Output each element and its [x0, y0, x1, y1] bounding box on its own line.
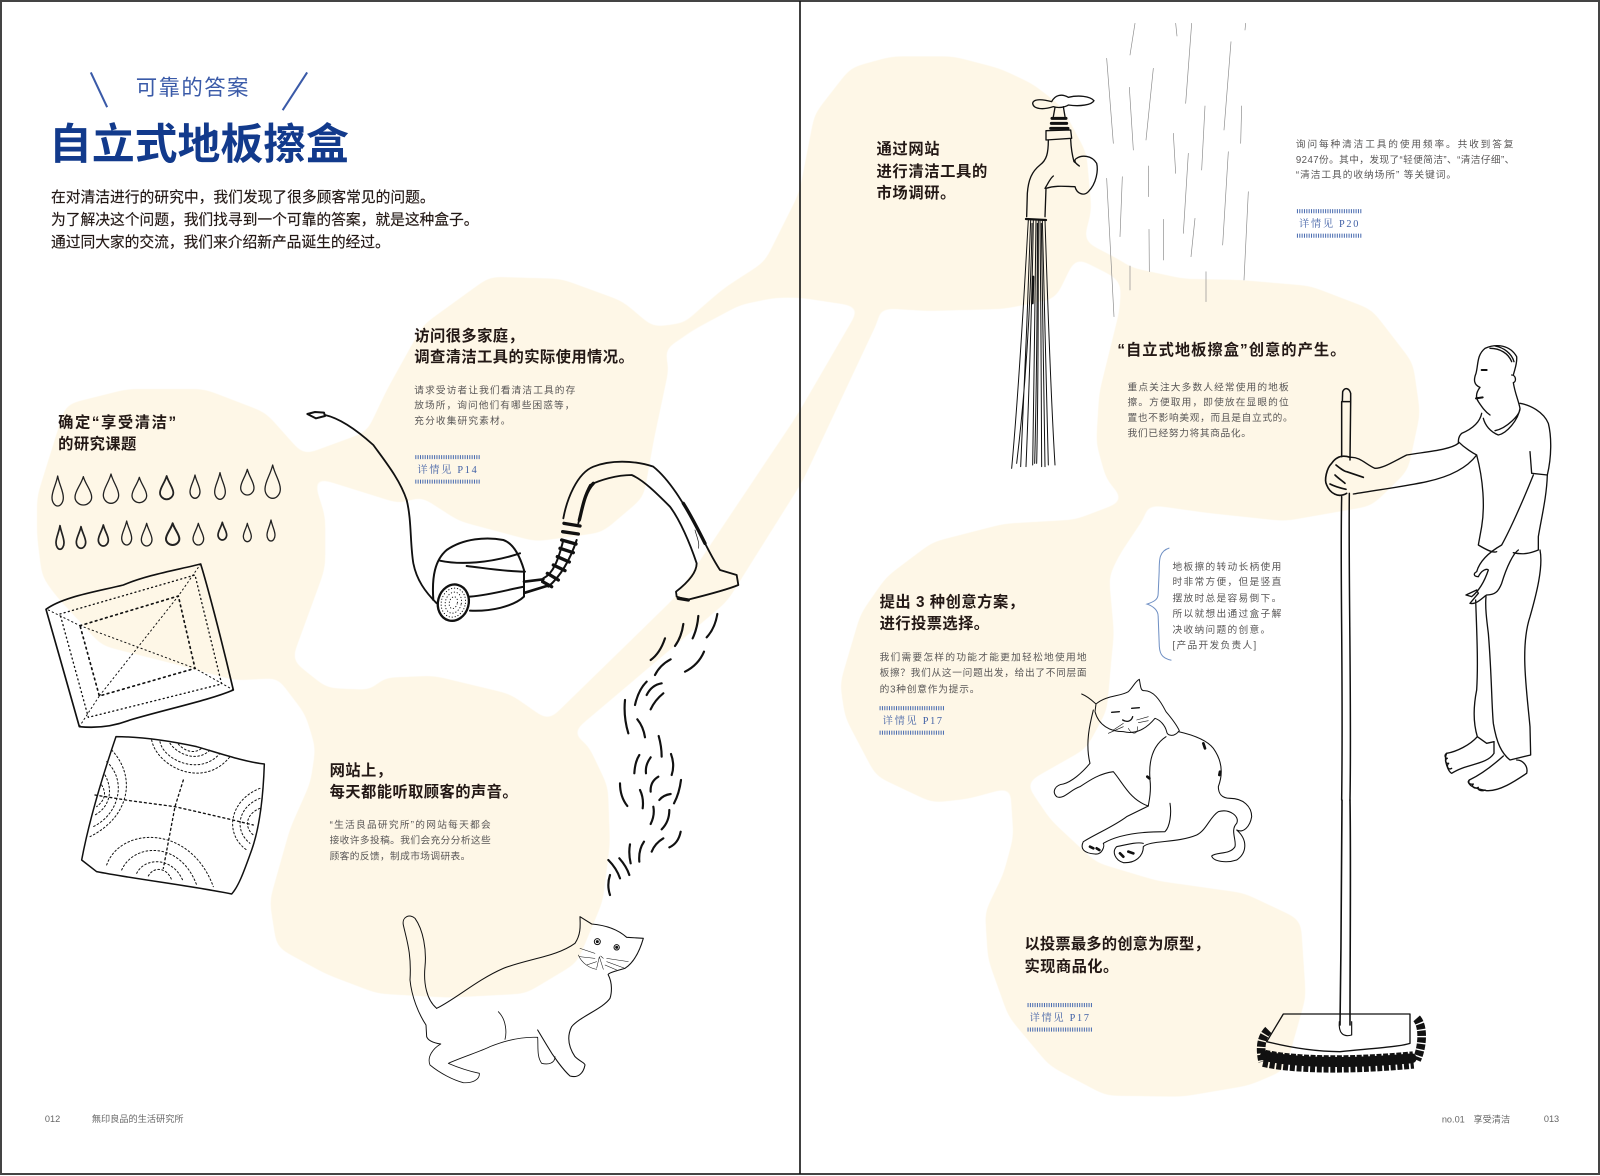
- step: home visits: 放场所，询问他们有哪些困惑等，: [414, 399, 576, 412]
- step: three proposals: [880, 593, 1088, 733]
- step: productize: [1024, 935, 1210, 1030]
- intro text: 在对清洁进行的研究中，我们发现了很多顾客常见的问题。: [51, 189, 435, 206]
- step: web survey: 进行清洁工具的: [877, 163, 988, 181]
- step: home visits: 请求受访者让我们看清洁工具的存: [414, 383, 576, 396]
- step: three proposals: 的3种创意作为提示。: [880, 682, 981, 695]
- step: web survey: 市场调研。: [877, 184, 956, 202]
- intro text: 为了解决这个问题，我们找寻到一个可靠的答案，就是这种盒子。: [51, 210, 479, 228]
- tag: see P17: 详情见 P17: [883, 714, 944, 727]
- mop pole lower: [1340, 800, 1350, 1025]
- step: three proposals: 提出 3 种创意方案，: [880, 593, 1024, 611]
- brace: [1147, 548, 1171, 660]
- mop pole upper: [1341, 389, 1351, 800]
- legs and feet: [1474, 550, 1541, 760]
- step: home visits: [414, 327, 634, 482]
- footer left: 012: [45, 1114, 60, 1124]
- napkin 1: [46, 564, 233, 727]
- step: web survey: [877, 141, 988, 202]
- title: 自立式地板擦盒: [49, 121, 349, 169]
- step: three proposals: 进行投票选择。: [880, 615, 990, 633]
- step: customer voice: “生活良品研究所”的网站每天都会: [330, 818, 492, 831]
- developer note with brace: 时非常方便，但是竖直: [1172, 575, 1283, 588]
- step: idea born: 置也不影响美观，而且是自立式的。: [1128, 411, 1294, 424]
- step: productize: 实现商品化。: [1024, 957, 1119, 975]
- footer right: [1442, 1113, 1559, 1124]
- step: customer voice: 顾客的反馈，制成市场调研表。: [330, 850, 471, 863]
- step: idea born: 我们已经努力将其商品化。: [1128, 427, 1252, 440]
- heading decoration: right slash: [283, 72, 307, 110]
- developer note with brace: 摆放时总是容易倒下。: [1172, 592, 1283, 605]
- subtitle: 可靠的答案: [136, 76, 250, 100]
- cat face: [578, 948, 628, 970]
- tag: see P17: [880, 708, 945, 733]
- step: home visits: 访问很多家庭，: [414, 327, 524, 345]
- step: three proposals: 板擦？我们从这一问题出发，给出了不同层面: [880, 666, 1088, 679]
- developer note with brace: [1147, 548, 1283, 660]
- step: research topic: 确定“享受清洁”: [58, 414, 177, 432]
- step: customer voice: 每天都能听取顾客的声音。: [330, 783, 518, 801]
- step: idea born: 重点关注大多数人经常使用的地板: [1128, 380, 1290, 393]
- rain lines: [1107, 23, 1248, 317]
- step: three proposals: 我们需要怎样的功能才能更加轻松地使用地: [880, 651, 1088, 664]
- footer left: [45, 1113, 184, 1124]
- head: [1475, 346, 1520, 435]
- icon: licking cat: [1054, 679, 1252, 863]
- icon: napkins and water drops: [46, 465, 280, 894]
- step: idea born: 擦。方便取用，即使放在显眼的位: [1128, 396, 1290, 409]
- step: customer voice: 接收许多投稿。我们会充分分析这些: [330, 833, 492, 846]
- step: research topic: [58, 414, 177, 453]
- torso and arms: [1351, 403, 1551, 552]
- survey detail text: “清洁工具的收纳场所” 等关键词。: [1296, 168, 1457, 181]
- cat body: [403, 916, 441, 1044]
- tag: see P14: [415, 457, 481, 482]
- step: home visits: 调查清洁工具的实际使用情况。: [414, 348, 634, 366]
- step: research topic: 的研究课题: [58, 435, 137, 453]
- heading decoration: left slash: [91, 72, 107, 107]
- intro text: 通过同大家的交流，我们来介绍新产品诞生的经过。: [51, 233, 390, 251]
- icon: vacuum cleaner: [307, 412, 738, 624]
- survey detail text: 9247份。其中，发现了“轻便简洁”、“清洁仔细”、: [1296, 153, 1515, 166]
- drops row 2: [56, 520, 275, 549]
- icon: man holding mop: [1326, 346, 1551, 800]
- tag: see P20: 详情见 P20: [1299, 217, 1360, 230]
- background: cream blobs and connectors: [38, 57, 1419, 1096]
- faucet body: [1033, 95, 1094, 109]
- developer note with brace: [产品开发负责人]: [1172, 638, 1258, 651]
- step: idea born: “自立式地板擦盒”创意的产生。: [1117, 341, 1346, 359]
- tag: see P20: [1297, 211, 1362, 236]
- water jet: [1026, 219, 1046, 220]
- scattered dust dashes: [608, 614, 717, 895]
- intro text: [51, 189, 479, 251]
- drops row 1: [52, 465, 280, 506]
- footer right: 013: [1544, 1114, 1559, 1124]
- footer right: no.01: [1442, 1114, 1465, 1124]
- developer note with brace: 地板擦的转动长柄使用: [1172, 560, 1283, 573]
- tag: see P17: 详情见 P17: [1030, 1011, 1091, 1024]
- survey detail text: [1296, 137, 1515, 236]
- tag: see P17: [1028, 1005, 1093, 1030]
- step: web survey: 通过网站: [877, 141, 940, 158]
- step: customer voice: 网站上，: [330, 763, 392, 780]
- survey detail text: 询问每种清洁工具的使用频率。共收到答复: [1296, 137, 1515, 150]
- step: home visits: 充分收集研究素材。: [414, 414, 512, 427]
- developer note with brace: 决收纳问题的创意。: [1172, 623, 1272, 636]
- step: customer voice: [330, 763, 518, 863]
- napkin 2: [82, 737, 264, 894]
- icon: faucet with rain and water: [1012, 23, 1248, 468]
- footer left: 無印良品的生活研究所: [92, 1113, 184, 1124]
- tag: see P14: 详情见 P14: [417, 463, 478, 476]
- step: idea born: [1117, 341, 1346, 440]
- developer note with brace: 所以就想出通过盒子解: [1172, 607, 1283, 620]
- icon: dashes and standing cat: [403, 614, 717, 1083]
- step: productize: 以投票最多的创意为原型，: [1024, 935, 1210, 953]
- footer right: 享受清洁: [1473, 1113, 1510, 1124]
- icon: mop head and pole: [1261, 800, 1422, 1064]
